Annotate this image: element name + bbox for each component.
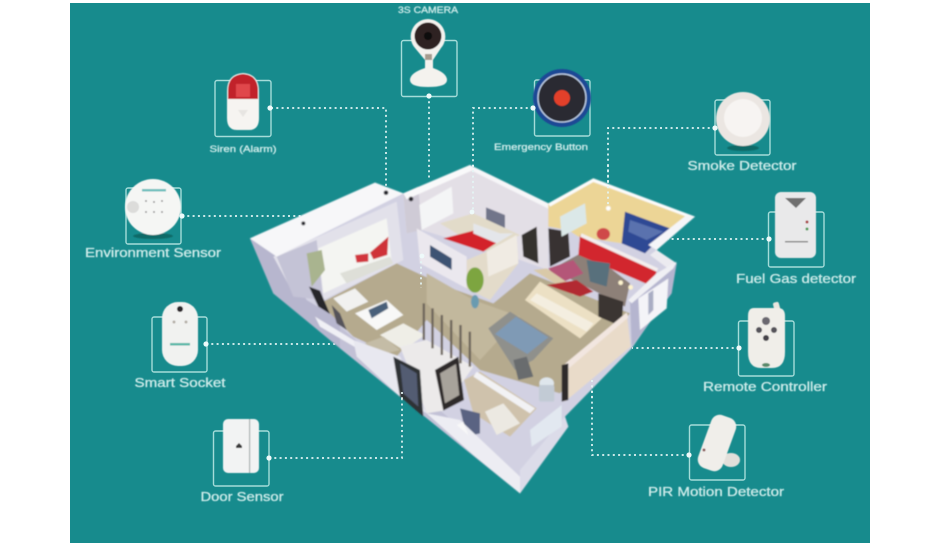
camera icon (410, 19, 447, 87)
living room furniture (333, 288, 368, 312)
plant (466, 267, 484, 293)
lower white wall (353, 340, 427, 413)
remote controller label: Remote Controller (703, 379, 828, 394)
balcony glass (562, 313, 631, 402)
socket icon (162, 302, 198, 366)
bathroom (464, 372, 537, 437)
siren icon (227, 73, 259, 130)
floor (320, 263, 630, 393)
yellow room walls (548, 178, 688, 247)
kitchen counter (525, 282, 602, 338)
ceiling devices (301, 221, 305, 225)
device: environment sensor (85, 179, 222, 260)
smart socket label: Smart Socket (134, 375, 226, 390)
bedroom partition (417, 228, 467, 288)
emergency button label: Emergency Button (494, 142, 588, 153)
white wall ends (648, 215, 695, 250)
red chairs (355, 253, 368, 263)
living room walls (273, 202, 403, 300)
smoke detector icon (716, 92, 770, 151)
door sensor icon (223, 419, 259, 473)
red kitchen wall (578, 235, 657, 286)
fuel gas detector label: Fuel Gas detector (736, 271, 857, 286)
camera label: 3S CAMERA (398, 5, 459, 16)
smoke detector label: Smoke Detector (688, 158, 797, 173)
device: PIR motion detector (648, 412, 785, 499)
device: smart socket (134, 302, 226, 390)
door sensor label: Door Sensor (200, 489, 284, 504)
water cooler (539, 377, 554, 389)
device: 3S camera (398, 5, 459, 99)
dining table (488, 312, 553, 370)
device: siren (210, 73, 276, 154)
device: emergency button (494, 69, 591, 153)
bed (443, 231, 498, 252)
device: fuel gas detector (736, 192, 857, 286)
PIR icon (695, 412, 740, 474)
gas detector icon (775, 192, 816, 258)
emergency button icon (533, 69, 591, 127)
living room window (318, 218, 392, 293)
bedroom walls (403, 165, 548, 270)
connector lines in front of the house (402, 165, 608, 402)
PIR motion detector label: PIR Motion Detector (648, 484, 785, 499)
environment sensor icon (125, 179, 181, 239)
lights (618, 280, 623, 285)
dark doors (522, 227, 538, 263)
device: door sensor (200, 419, 284, 504)
slat partition (423, 303, 471, 367)
kitchen interior (550, 250, 630, 307)
east room exterior (630, 263, 677, 347)
exterior walls (250, 165, 695, 493)
front edge of wall (315, 317, 360, 350)
second door (435, 357, 464, 411)
environment sensor label: Environment Sensor (85, 245, 222, 260)
siren label: Siren (Alarm) (210, 144, 276, 154)
entrance door (393, 357, 423, 417)
device: smoke detector (688, 92, 797, 173)
device: remote controller (703, 301, 828, 394)
isometric house cutaway (250, 165, 695, 493)
connector lines behind the house (182, 96, 769, 458)
remote icon (748, 301, 785, 368)
